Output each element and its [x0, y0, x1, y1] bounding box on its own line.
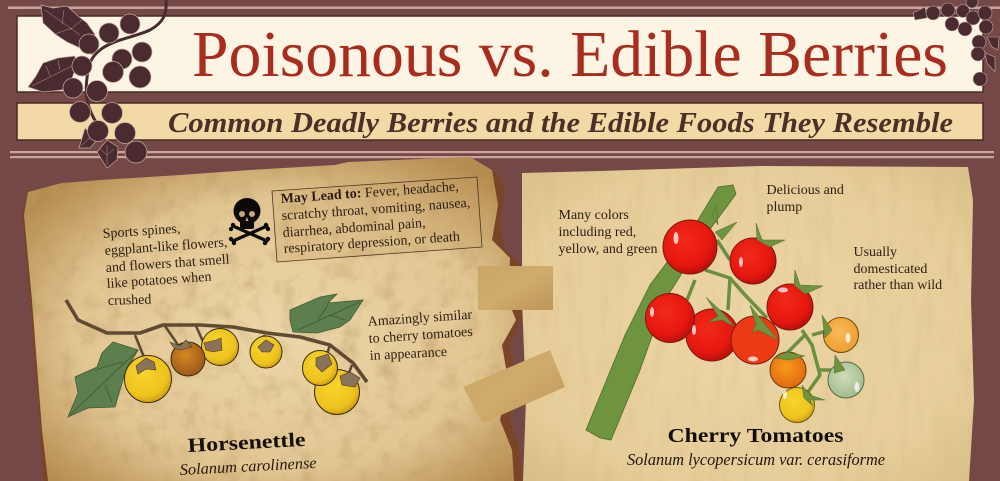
text: usually domesticated: domesticated — [854, 262, 927, 277]
leaf left — [68, 342, 138, 417]
callout: may lead to: diarrhea, abdominal pain, — [282, 216, 426, 241]
main stem — [586, 185, 736, 440]
subtitle: Common Deadly Berries and the Edible Foods They Resemble — [168, 108, 953, 139]
text: many colors: Many colors — [558, 208, 629, 223]
text: amazingly similar: to cherry tomatoes — [368, 325, 473, 347]
text: sports spines: like potatoes when — [106, 270, 212, 292]
text: sports spines: eggplant-like flowers, — [104, 235, 228, 259]
heading: cherry tomatoes: Cherry Tomatoes — [668, 425, 844, 447]
text: amazingly similar — [367, 308, 473, 364]
calyxes — [706, 205, 845, 406]
callout: may lead to: respiratory depression, or death — [283, 230, 460, 257]
icon: skull and crossbones — [229, 198, 270, 245]
icon: berry vine left — [28, 0, 166, 168]
text: latin name horsenettle: Solanum carolinense — [179, 455, 317, 479]
heading: horsenettle: Horsenettle — [187, 429, 306, 457]
header bottom rules — [10, 151, 994, 158]
panel: horsenettle paper — [22, 157, 522, 481]
text: amazingly similar: in appearance — [369, 345, 447, 364]
text: sports spines: crushed — [108, 292, 152, 309]
icon: berry vine right — [913, 0, 999, 86]
leaf right — [290, 294, 363, 333]
text: delicious and plump: Delicious and — [766, 183, 844, 198]
text: sports spines: Sports spines, — [102, 222, 181, 242]
header top rule — [8, 6, 1000, 9]
callout: may lead to — [272, 177, 482, 262]
text: many colors: yellow, and green — [558, 242, 658, 257]
text: usually domesticated: rather than wild — [854, 278, 942, 293]
tape: upper — [478, 266, 553, 310]
title banner — [17, 16, 983, 92]
title: Poisonous vs. Edible Berries — [192, 18, 948, 91]
text: amazingly similar: Amazingly similar — [367, 308, 473, 330]
text: usually domesticated: Usually — [854, 245, 897, 260]
illustration: horsenettle branch — [66, 294, 367, 417]
subtitle band — [17, 103, 983, 140]
text: delicious and plump — [766, 183, 844, 215]
tape: lower — [463, 350, 565, 423]
calyxes — [136, 338, 360, 387]
tomatoes — [686, 309, 738, 361]
text: sports spines: and flowers that smell — [105, 252, 230, 276]
text: delicious and plump: plump — [766, 200, 802, 215]
callout: may lead to: May Lead to: Fever, headache, — [280, 180, 459, 207]
callout: may lead to: scratchy throat, vomiting, nausea, — [281, 196, 471, 224]
text: sports spines — [102, 222, 230, 309]
text: latin name cherry tomatoes: Solanum lycopersicum var. cerasiforme — [627, 450, 885, 469]
highlights — [650, 232, 860, 399]
berries — [202, 328, 238, 366]
text: many colors: including red, — [558, 225, 636, 240]
illustration: cherry tomato vine — [586, 185, 864, 440]
branches — [687, 240, 840, 392]
text: usually domesticated — [854, 245, 942, 293]
text: many colors — [558, 208, 658, 257]
branch — [66, 300, 367, 382]
panel: cherry tomatoes paper — [522, 166, 974, 481]
